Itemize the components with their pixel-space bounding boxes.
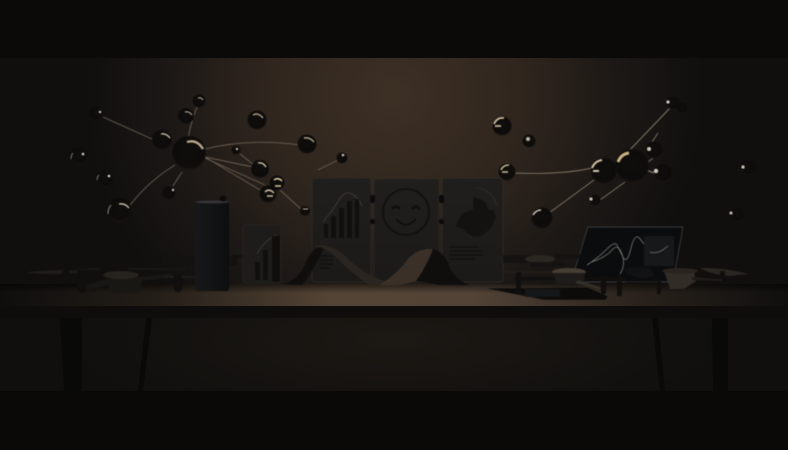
text lines	[319, 256, 333, 268]
front drone	[28, 268, 209, 293]
table top	[0, 284, 788, 306]
curve	[323, 193, 362, 222]
rear drone cluster	[503, 254, 580, 267]
ribbon back fold	[283, 246, 326, 285]
left drones	[28, 254, 246, 293]
pie shape	[456, 197, 496, 237]
large panel: pie chart	[442, 178, 503, 282]
inset chart	[644, 236, 674, 266]
ribbon second rise	[379, 249, 433, 286]
ribbon second fall	[416, 249, 470, 285]
tablet with charts	[571, 227, 683, 282]
rear drone	[151, 254, 246, 265]
under-table area	[0, 306, 788, 391]
network connectors left	[103, 107, 338, 210]
large panel: bar chart	[312, 178, 371, 282]
line chart	[587, 237, 651, 274]
front drones	[500, 267, 749, 296]
table legs	[60, 318, 728, 391]
flat tablet	[484, 287, 608, 300]
cylinder speaker	[195, 196, 229, 291]
left molecular network	[70, 94, 348, 222]
right molecular network	[492, 96, 756, 228]
right drones	[500, 254, 749, 296]
ribbon	[283, 245, 470, 286]
ribbon first slope	[313, 245, 399, 285]
text lines	[449, 247, 483, 259]
bars	[324, 199, 359, 238]
background wall	[0, 58, 788, 308]
spheres left	[70, 94, 348, 222]
table shadow line	[0, 284, 788, 293]
top letterbox band	[0, 0, 788, 58]
large panel: smiley	[374, 179, 439, 282]
smiley face	[383, 189, 429, 235]
bottom letterbox band	[0, 391, 788, 450]
small chart panel	[243, 225, 281, 283]
spheres right	[492, 96, 756, 228]
panel hinges	[370, 195, 444, 224]
network connectors right	[515, 108, 670, 213]
